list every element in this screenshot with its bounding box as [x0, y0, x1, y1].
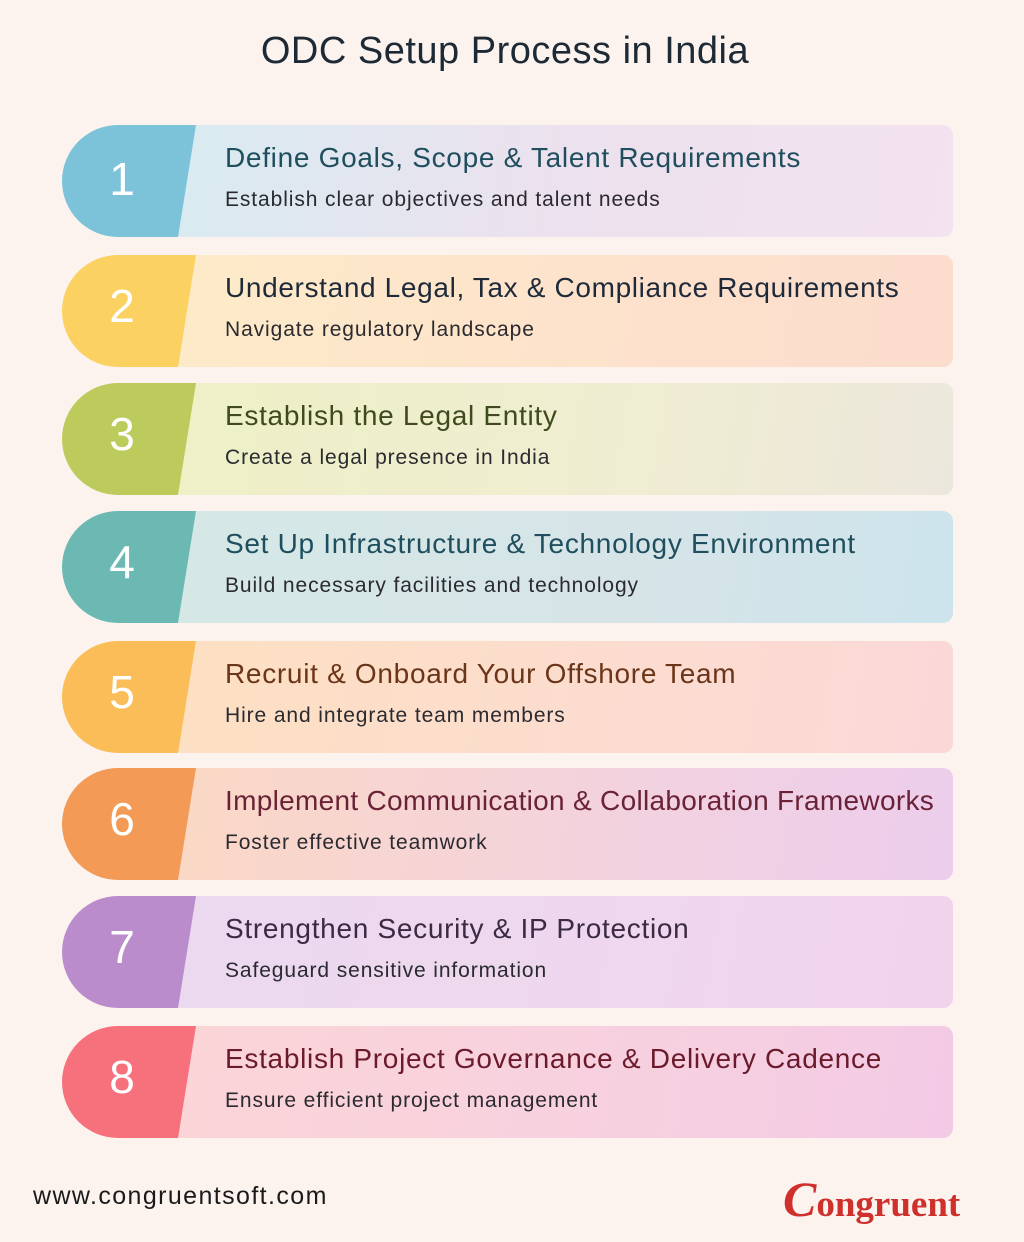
step 4: Build necessary facilities and technology	[225, 574, 639, 597]
step 6: Implement Communication & Collaboration Frameworks	[225, 785, 934, 816]
logo: Congruent	[783, 1171, 960, 1227]
title: ODC Setup Process in India	[261, 30, 749, 72]
step 6	[62, 768, 953, 880]
step 5	[62, 641, 953, 753]
footer url: www.congruentsoft.com	[33, 1182, 328, 1210]
step 8: Ensure efficient project management	[225, 1089, 598, 1112]
step 2: Understand Legal, Tax & Compliance Requirements	[225, 272, 899, 303]
step 3	[62, 383, 953, 495]
step 2: Navigate regulatory landscape	[225, 318, 535, 341]
step 7: Strengthen Security & IP Protection	[225, 913, 689, 944]
step 3: 3	[109, 408, 135, 460]
step 1	[62, 125, 953, 237]
step 4: 4	[109, 536, 135, 588]
step 2	[62, 255, 953, 367]
step 5: Recruit & Onboard Your Offshore Team	[225, 658, 736, 689]
step 8: 8	[109, 1051, 135, 1103]
step 7	[62, 896, 953, 1008]
step 1: Define Goals, Scope & Talent Requirements	[225, 142, 801, 173]
step 1: 1	[109, 153, 135, 205]
step 1: Establish clear objectives and talent needs	[225, 188, 661, 211]
step 4: Set Up Infrastructure & Technology Environment	[225, 528, 856, 559]
step 8	[62, 1026, 953, 1138]
step 5: Hire and integrate team members	[225, 704, 566, 727]
step 7: 7	[109, 921, 135, 973]
step 6: Foster effective teamwork	[225, 831, 488, 854]
step 6: 6	[109, 793, 135, 845]
step 3: Establish the Legal Entity	[225, 400, 558, 431]
step 5: 5	[109, 666, 135, 718]
step 2: 2	[109, 280, 135, 332]
step 4	[62, 511, 953, 623]
step 8: Establish Project Governance & Delivery Cadence	[225, 1043, 882, 1074]
step 7: Safeguard sensitive information	[225, 959, 547, 982]
step 3: Create a legal presence in India	[225, 446, 550, 469]
